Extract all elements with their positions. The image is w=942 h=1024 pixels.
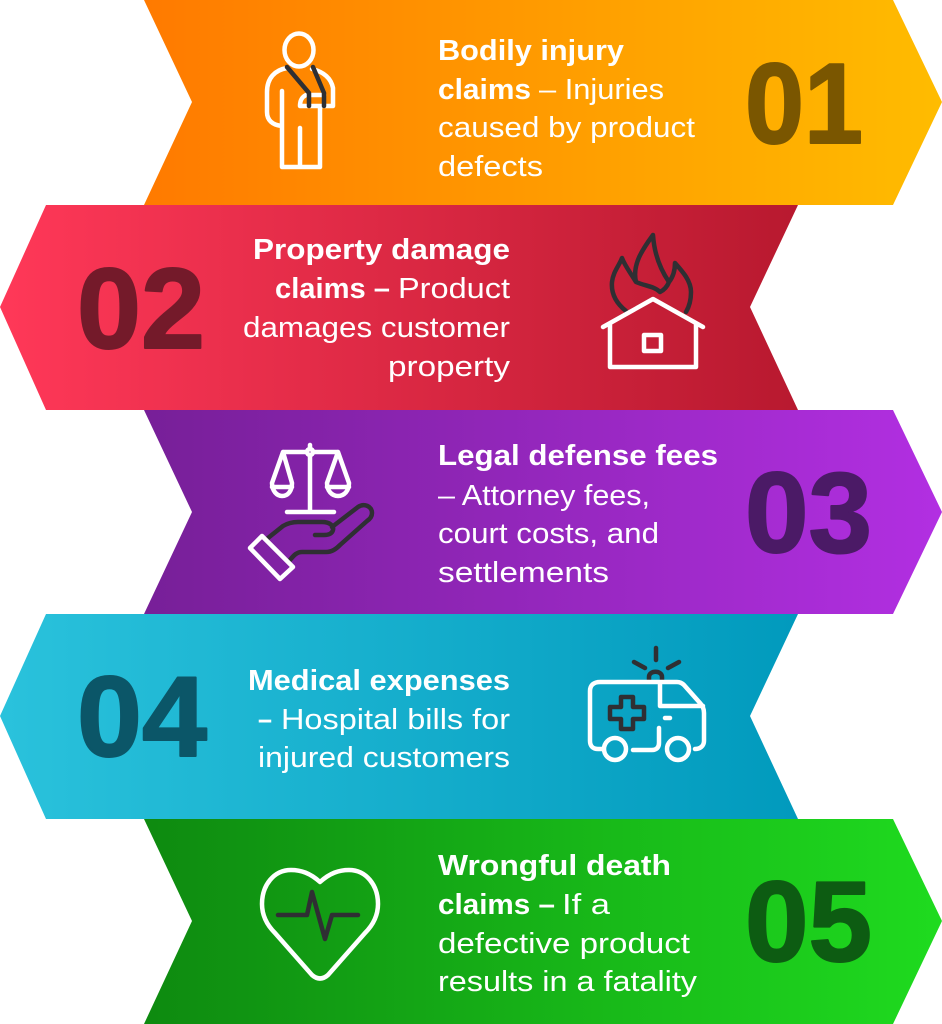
panel: legal defense fees bbox=[144, 410, 942, 614]
text: property damage claims: Product bbox=[398, 273, 510, 305]
icon: ambulance bbox=[590, 648, 704, 760]
number 01: 01 bbox=[745, 41, 863, 168]
number 03: 03 bbox=[745, 450, 872, 577]
text: bodily injury claims: Bodily injury bbox=[438, 35, 624, 67]
text: legal defense fees: court costs, and bbox=[438, 518, 659, 550]
text: property damage claims: property bbox=[388, 351, 511, 383]
panel: wrongful death claims bbox=[144, 819, 942, 1024]
text: wrongful death claims: defective product bbox=[438, 928, 690, 960]
text: wrongful death claims: If a bbox=[562, 889, 611, 921]
text: legal defense fees: settlements bbox=[438, 557, 609, 589]
text: legal defense fees bbox=[438, 440, 718, 589]
panel: bodily injury claims bbox=[144, 0, 942, 205]
text: wrongful death claims: claims – bbox=[438, 889, 555, 921]
text: bodily injury claims bbox=[438, 35, 695, 183]
panel: medical expenses bbox=[0, 614, 798, 819]
text: bodily injury claims: defects bbox=[438, 151, 543, 183]
text: property damage claims: Property damage bbox=[253, 234, 510, 266]
text: bodily injury claims: – Injuries bbox=[539, 74, 664, 106]
chevron band 3 bbox=[144, 410, 942, 614]
text: bodily injury claims: claims bbox=[438, 74, 531, 106]
text: medical expenses: – bbox=[258, 704, 272, 736]
text: property damage claims: damages customer bbox=[243, 312, 510, 344]
icon: house on fire bbox=[603, 235, 703, 367]
text: bodily injury claims: caused by product bbox=[438, 112, 695, 144]
panel: property damage claims bbox=[0, 205, 798, 410]
text: wrongful death claims: results in a fatality bbox=[438, 966, 698, 998]
icon: injured person with arm sling bbox=[267, 34, 333, 167]
number 02: 02 bbox=[77, 246, 205, 373]
text: legal defense fees: – Attorney fees, bbox=[438, 480, 650, 512]
text: medical expenses bbox=[248, 665, 510, 774]
text: property damage claims: claims – bbox=[275, 273, 390, 305]
icon: scales of justice over open hand bbox=[250, 445, 372, 579]
text: medical expenses: Medical expenses bbox=[248, 665, 510, 697]
number 05: 05 bbox=[745, 859, 872, 986]
text: wrongful death claims bbox=[438, 850, 698, 998]
chevron band 1 bbox=[144, 0, 942, 205]
chevron band 5 bbox=[144, 819, 942, 1024]
text: property damage claims bbox=[243, 234, 511, 383]
icon: heart with pulse line bbox=[262, 870, 378, 978]
chevron band 4 bbox=[0, 614, 798, 819]
text: medical expenses: injured customers bbox=[258, 742, 510, 774]
chevron band 2 bbox=[0, 205, 798, 410]
text: medical expenses: Hospital bills for bbox=[281, 704, 510, 736]
text: legal defense fees: Legal defense fees bbox=[438, 440, 718, 472]
text: wrongful death claims: Wrongful death bbox=[438, 850, 671, 882]
number 04: 04 bbox=[77, 654, 207, 781]
